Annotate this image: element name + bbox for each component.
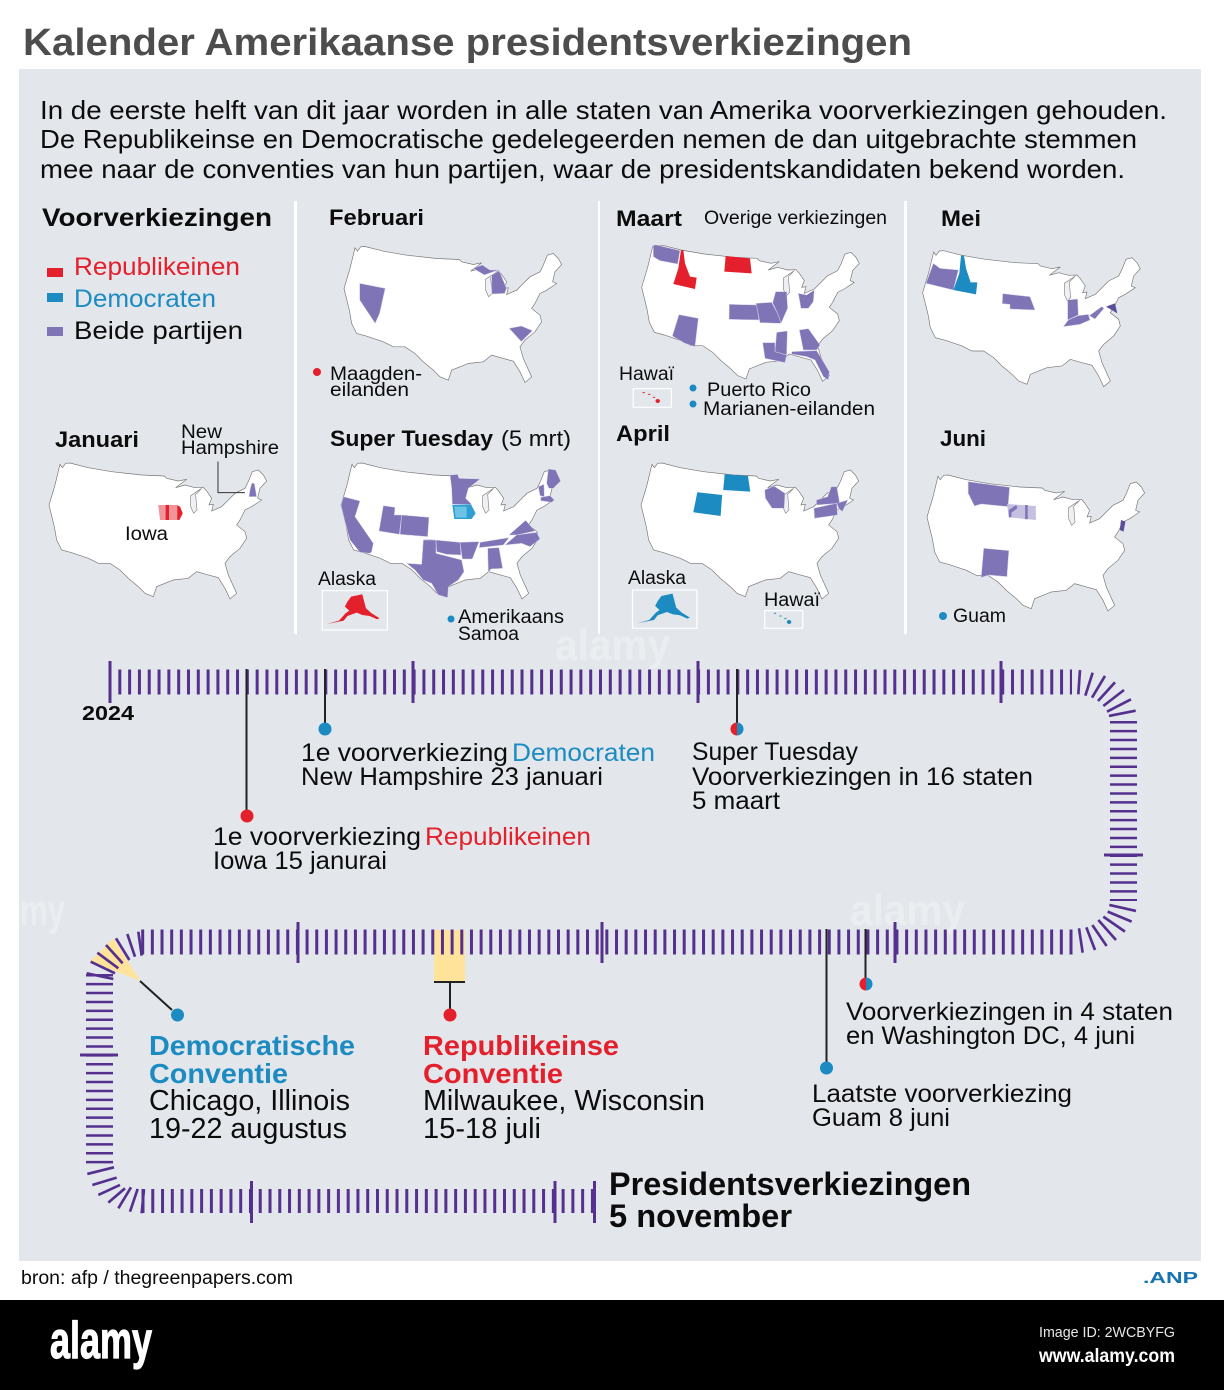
map: Februari: eilanden [330, 380, 409, 401]
map: Super Tuesday: Alaska [318, 569, 376, 590]
intro text: In de eerste helft van dit jaar worden in alle staten van Amerika voorverkiezingen gehouden. [40, 95, 1167, 125]
map: Super Tuesday [318, 426, 571, 645]
map: April [616, 421, 859, 628]
marker: Republikeinse Conventie [423, 982, 705, 1145]
timeline track [80, 661, 1143, 1223]
marker: Democratische Conventie [140, 981, 355, 1145]
marker: New Hampshire [301, 669, 655, 791]
intro text [40, 95, 1167, 184]
marker: Iowa: Republikeinen [425, 823, 591, 851]
footer bar [0, 1300, 1224, 1390]
marker: Super Tuesday: Voorverkiezingen in 16 staten [692, 763, 1033, 791]
legend: Republikeinen [74, 253, 240, 281]
map: Maart: Overige verkiezingen [704, 208, 887, 229]
marker: New Hampshire: Democraten [512, 739, 655, 767]
marker: New Hampshire: New Hampshire 23 januari [301, 763, 603, 791]
map: Juni: Juni [940, 426, 986, 451]
map: Januari: Iowa [125, 524, 168, 545]
legend: Voorverkiezingen [42, 204, 272, 232]
marker: New Hampshire: 1e voorverkiezing [301, 739, 508, 767]
election day [609, 1166, 971, 1234]
map: Maart: Marianen-eilanden [703, 399, 875, 420]
map: Januari: Hampshire [181, 438, 279, 459]
marker: Republikeinse Conventie: 15-18 juli [423, 1113, 541, 1145]
legend: Beide partijen [74, 317, 243, 345]
marker: Democratische Conventie: Chicago, Illinois [149, 1085, 350, 1117]
watermarks: my [20, 886, 65, 935]
marker: Iowa: Iowa 15 janurai [213, 847, 387, 875]
intro text: mee naar de conventies van hun partijen, waar de presidentskandidaten bekend worden. [40, 154, 1125, 184]
watermarks: alamy [850, 886, 965, 935]
map: April: April [616, 421, 670, 446]
marker: 4 juni [846, 929, 1173, 1050]
map: Februari [313, 205, 562, 401]
map: Januari: Januari [55, 427, 139, 452]
map: Maart: Maart [616, 206, 683, 231]
legend: Democraten [74, 285, 216, 313]
map: Juni [927, 426, 1145, 627]
map: Super Tuesday: (5 mrt) [501, 426, 571, 451]
marker: Super Tuesday: Super Tuesday [692, 738, 858, 766]
legend [42, 204, 272, 345]
marker: Guam [812, 929, 1072, 1132]
footer bar: Image ID: 2WCBYFG [1039, 1324, 1175, 1341]
marker: Republikeinse Conventie: Milwaukee, Wisconsin [423, 1085, 705, 1117]
watermarks [20, 621, 965, 935]
map: Mei [923, 206, 1140, 387]
map: Januari [49, 422, 279, 599]
marker: Democratische Conventie: Conventie [149, 1058, 288, 1089]
convention highlights [90, 930, 465, 982]
footer bar: alamy [50, 1312, 152, 1370]
map: Februari: Februari [329, 205, 424, 230]
ANP logo: .ANP [1143, 1270, 1198, 1287]
map: Super Tuesday: Super Tuesday [330, 426, 494, 451]
map: April: Hawaï [764, 590, 821, 611]
map: Maart [616, 206, 887, 420]
marker: Super Tuesday [692, 669, 1033, 815]
map: Mei: Mei [941, 206, 981, 231]
election day: 5 november [609, 1198, 792, 1234]
election day: Presidentsverkiezingen [609, 1166, 971, 1202]
marker: Republikeinse Conventie: Republikeinse [423, 1030, 619, 1061]
intro text: De Republikeinse en Democratische gedelegeerden nemen de dan uitgebrachte stemmen [40, 124, 1137, 154]
watermarks: alamy [555, 621, 670, 670]
year label: 2024 [82, 703, 135, 725]
map: Super Tuesday: Samoa [458, 624, 519, 645]
marker: Iowa: 1e voorverkiezing [213, 823, 421, 851]
marker: 4 juni: Voorverkiezingen in 4 staten [846, 998, 1173, 1026]
marker: Republikeinse Conventie: Conventie [423, 1058, 563, 1089]
marker: Guam: Guam 8 juni [812, 1104, 950, 1132]
map: April: Alaska [628, 568, 686, 589]
marker: 4 juni: en Washington DC, 4 juni [846, 1022, 1135, 1050]
marker: Iowa [213, 669, 591, 875]
column dividers [294, 201, 907, 634]
map: Maart: Puerto Rico [707, 380, 811, 401]
title: Kalender Amerikaanse presidentsverkiezingen [23, 22, 912, 64]
map: Super Tuesday: Amerikaans [458, 607, 564, 628]
marker: Guam: Laatste voorverkiezing [812, 1080, 1072, 1108]
map: Maart: Hawaï [619, 364, 675, 385]
marker: Democratische Conventie: Democratische [149, 1030, 355, 1061]
marker: Democratische Conventie: 19-22 augustus [149, 1113, 347, 1145]
source line: bron: afp / thegreenpapers.com [21, 1268, 293, 1289]
map: Januari: New [181, 422, 222, 443]
map: Februari: Maagden- [330, 364, 422, 385]
footer bar: www.alamy.com [1038, 1346, 1175, 1367]
marker: Super Tuesday: 5 maart [692, 787, 780, 815]
map: Juni: Guam [953, 606, 1006, 627]
